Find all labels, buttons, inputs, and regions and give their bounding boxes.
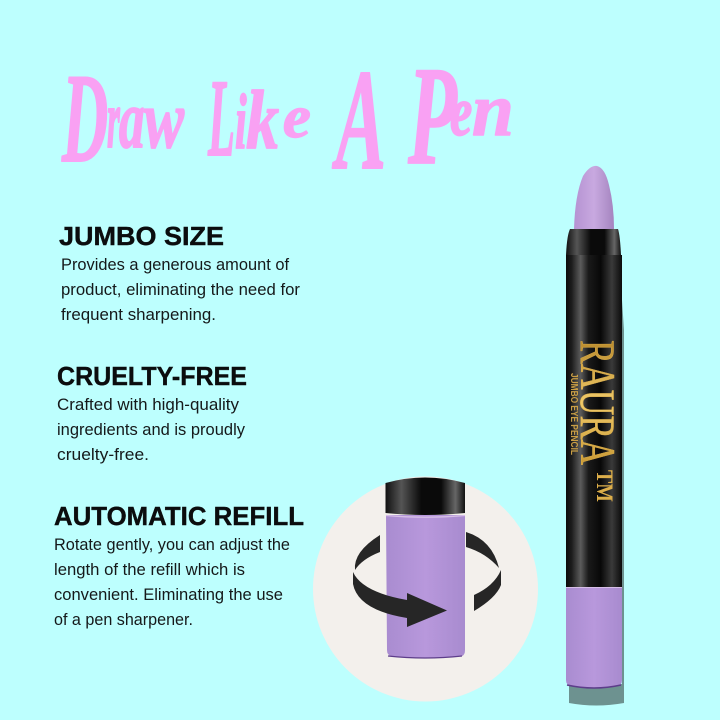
description: cruelty-free	[57, 396, 246, 464]
pencil purple base	[566, 587, 622, 688]
pencil body	[566, 255, 622, 587]
description: cruelty-free: Crafted with high-quality	[57, 396, 240, 414]
black cap	[386, 478, 465, 515]
title: e	[283, 84, 311, 151]
title: n	[472, 69, 514, 152]
inset: rotating refill	[313, 476, 538, 702]
trademark: TM	[592, 470, 617, 502]
description: cruelty-free: ingredients and is proudly	[57, 421, 246, 439]
title: A	[332, 40, 386, 199]
description: automatic refill	[54, 536, 290, 629]
title: L	[207, 58, 235, 180]
title: P	[407, 38, 458, 194]
title: r	[107, 74, 120, 165]
heading: jumbo size: JUMBO SIZE	[59, 221, 224, 251]
title: D	[61, 47, 108, 189]
description: jumbo size: Provides a generous amount of	[61, 256, 289, 274]
inset circle	[313, 476, 538, 702]
product name: JUMBO EYE PENCIL	[568, 373, 580, 455]
description: automatic refill: length of the refill which is	[54, 561, 245, 579]
heading: cruelty-free: CRUELTY-FREE	[57, 361, 247, 391]
title: k	[246, 75, 279, 167]
description: jumbo size: frequent sharpening.	[61, 306, 216, 324]
text block: cruelty-free	[57, 361, 247, 464]
brand name: RAURA	[570, 340, 626, 465]
text block: jumbo size	[59, 221, 301, 324]
description: jumbo size	[61, 256, 301, 324]
description: automatic refill: of a pen sharpener.	[54, 611, 193, 629]
description: automatic refill: convenient. Eliminating the use	[54, 586, 283, 604]
description: automatic refill: Rotate gently, you can adjust the	[54, 536, 290, 554]
title: a	[119, 74, 145, 165]
title: e	[450, 74, 472, 151]
pencil shadow	[569, 300, 624, 706]
heading: automatic refill: AUTOMATIC REFILL	[54, 501, 304, 531]
rotation arrow	[353, 532, 501, 627]
description: jumbo size: product, eliminating the need for	[61, 281, 301, 299]
description: cruelty-free: cruelty-free.	[57, 446, 149, 464]
title	[61, 38, 514, 199]
pencil tip	[574, 166, 614, 229]
pencil collar	[566, 229, 621, 255]
title: w	[144, 74, 185, 165]
title: i	[235, 78, 247, 165]
product: eye pencil	[566, 166, 626, 705]
refill barrel	[386, 515, 465, 658]
text block: automatic refill	[54, 501, 304, 629]
